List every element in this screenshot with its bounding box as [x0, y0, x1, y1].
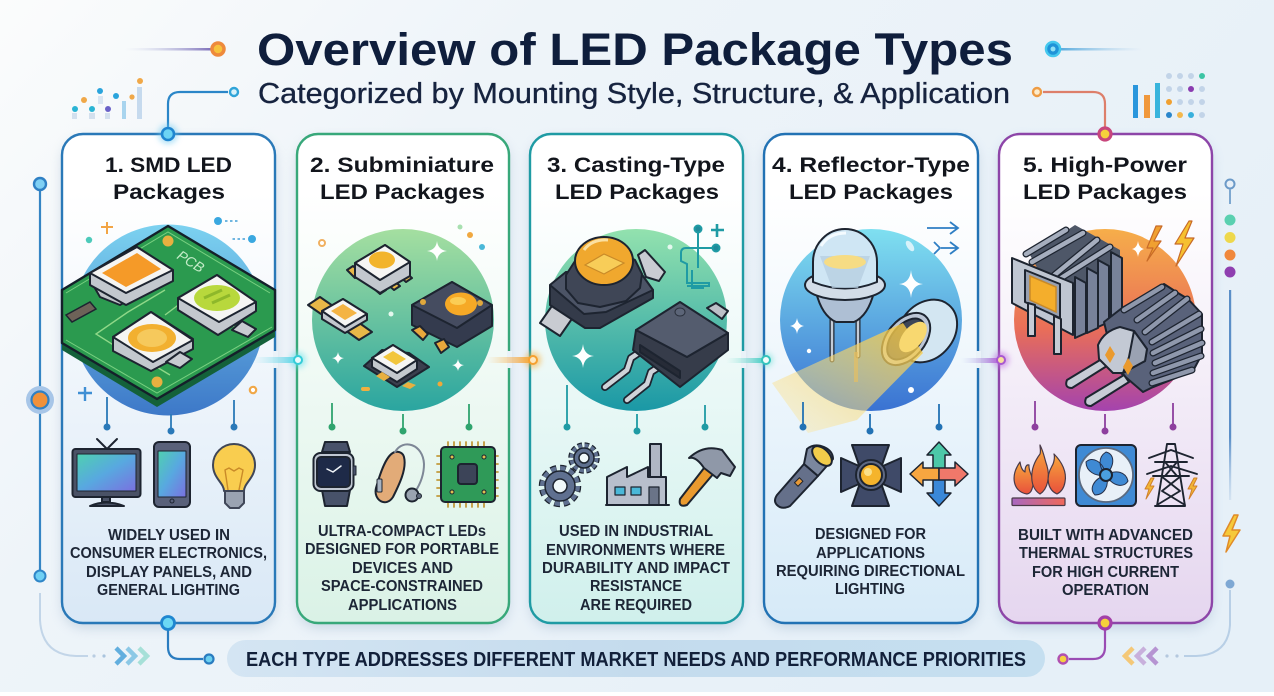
- pointer lines: [564, 385, 708, 434]
- connector: card 3 to 4: [726, 351, 773, 368]
- illustration: casting-type LEDs: [540, 229, 728, 411]
- illustration: PCB with SMD LEDs: [62, 224, 275, 416]
- description: subminiature: DESIGNED FOR PORTABLE: [305, 541, 499, 558]
- description: reflector-type: LIGHTING: [835, 581, 905, 598]
- description: reflector-type: [776, 526, 965, 598]
- icon: circuit chip: [437, 442, 498, 507]
- icon: stage spotlight: [841, 445, 901, 506]
- heading: reflector-type: [772, 153, 970, 204]
- icon: light bulb: [213, 444, 255, 508]
- description: SMD: GENERAL LIGHTING: [97, 582, 240, 599]
- illustration: PCB with SMD LEDs: PCB: [174, 247, 207, 276]
- title accent left: [125, 43, 224, 55]
- description: high-power: FOR HIGH CURRENT: [1032, 564, 1179, 581]
- icon: factory: [606, 444, 669, 505]
- heading: casting-type: [547, 153, 725, 204]
- icon: direction arrows: [927, 222, 958, 254]
- description: casting-type: ENVIRONMENTS WHERE: [546, 542, 725, 559]
- connector: card 5 bottom: [1058, 617, 1111, 664]
- description: subminiature: SPACE-CONSTRAINED: [321, 578, 483, 595]
- sparkle decorations: [319, 224, 485, 250]
- mini chart left: [72, 78, 143, 119]
- heading: reflector-type: 4. Reflector-Type: [772, 153, 970, 177]
- connector: card 4 to 5: [961, 351, 1009, 368]
- heading: high-power: LED Packages: [1023, 180, 1187, 204]
- description: SMD: CONSUMER ELECTRONICS,: [70, 545, 267, 562]
- heading: subminiature: LED Packages: [320, 180, 485, 204]
- icon: smartphone: [154, 442, 190, 507]
- description: casting-type: [542, 523, 730, 614]
- icon: television: [72, 439, 140, 506]
- icon: hearing aid: [376, 444, 424, 502]
- icon: flashlight: [775, 443, 835, 508]
- mini chart right: [1133, 73, 1205, 118]
- description: subminiature: ULTRA-COMPACT LEDs: [318, 523, 486, 540]
- heading: subminiature: 2. Subminiature: [310, 153, 494, 177]
- description: SMD: WIDELY USED IN: [108, 527, 230, 544]
- pointer lines: [104, 397, 237, 434]
- description: casting-type: RESISTANCE: [590, 578, 682, 595]
- sparkle decorations: [78, 217, 256, 401]
- description: casting-type: ARE REQUIRED: [580, 597, 692, 614]
- title accent right: [1046, 42, 1142, 56]
- connector: card 5 top: [1033, 88, 1111, 140]
- panel: reflector-type LED packages: [764, 134, 978, 623]
- icon: gears: [543, 446, 596, 503]
- right rail: [1125, 180, 1240, 664]
- pointer lines: [329, 403, 472, 434]
- pointer lines: [800, 402, 942, 434]
- icon: flames: [1012, 445, 1065, 506]
- panel: subminiature LED packages: [297, 134, 509, 623]
- panel: high-power LED packages: [999, 134, 1212, 623]
- description: SMD: [70, 527, 267, 599]
- icon: hammer: [680, 448, 735, 506]
- heading: reflector-type: LED Packages: [789, 180, 953, 204]
- footer banner: [227, 640, 1045, 677]
- heading: high-power: 5. High-Power: [1023, 153, 1188, 177]
- illustration: reflector LEDs: [772, 229, 970, 433]
- heading: SMD: Packages: [113, 180, 225, 204]
- icon: cooling fan: [1076, 445, 1136, 506]
- panel: SMD LED packages: [62, 134, 275, 623]
- description: SMD: DISPLAY PANELS, AND: [86, 564, 252, 581]
- card shadows: [62, 139, 1212, 628]
- icon: power tower: [1145, 444, 1197, 506]
- footer banner: EACH TYPE ADDRESSES DIFFERENT MARKET NEEDS AND PERFORMANCE PRIORITIES: [246, 648, 1026, 671]
- description: high-power: [1018, 527, 1193, 599]
- description: subminiature: APPLICATIONS: [348, 597, 457, 614]
- illustration: subminiature LEDs: [308, 229, 494, 411]
- description: high-power: THERMAL STRUCTURES: [1019, 545, 1193, 562]
- pointer lines: [1032, 401, 1176, 434]
- title: Overview of LED Package Types: [257, 24, 1013, 75]
- connector: card 1 top: [158, 88, 238, 144]
- icon: smartwatch: [314, 442, 356, 506]
- connector: card 1 bottom: [162, 616, 214, 664]
- heading: casting-type: 3. Casting-Type: [547, 153, 725, 177]
- left rail: [26, 178, 147, 664]
- description: subminiature: DEVICES AND: [352, 560, 453, 577]
- description: subminiature: [305, 523, 499, 614]
- icon: four-way arrows: [910, 442, 968, 506]
- heading: SMD: 1. SMD LED: [105, 153, 232, 177]
- icon: circuit decoration: [681, 224, 724, 288]
- description: casting-type: DURABILITY AND IMPACT: [542, 560, 730, 577]
- description: reflector-type: DESIGNED FOR: [815, 526, 926, 543]
- description: high-power: BUILT WITH ADVANCED: [1018, 527, 1193, 544]
- panel: casting-type LED packages: [530, 134, 743, 623]
- heading: casting-type: LED Packages: [555, 180, 719, 204]
- description: high-power: OPERATION: [1062, 582, 1149, 599]
- heading: subminiature: [310, 153, 494, 204]
- description: reflector-type: REQUIRING DIRECTIONAL: [776, 563, 965, 580]
- connector: card 1 to 2: [252, 351, 306, 368]
- illustration: heat sinks: [1012, 221, 1202, 411]
- connector: card 2 to 3: [487, 351, 541, 368]
- subtitle: Categorized by Mounting Style, Structure, & Application: [258, 78, 1010, 110]
- heading: high-power: [1023, 153, 1188, 204]
- description: reflector-type: APPLICATIONS: [816, 545, 925, 562]
- heading: SMD: [105, 153, 232, 204]
- description: casting-type: USED IN INDUSTRIAL: [559, 523, 713, 540]
